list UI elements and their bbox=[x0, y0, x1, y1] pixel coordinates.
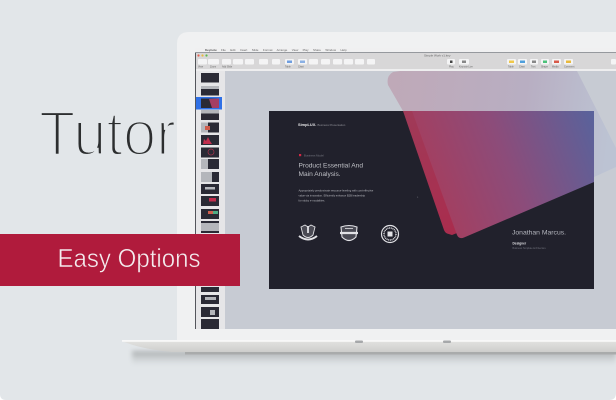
laptop lid bbox=[177, 32, 616, 340]
banner: Easy Options bbox=[0, 234, 240, 286]
front gradient card bbox=[412, 111, 594, 238]
menu bar: Keynote bbox=[205, 48, 217, 52]
laptop bbox=[122, 32, 616, 365]
toolbar: Add Slide bbox=[222, 65, 233, 68]
slide paragraph: for sticky e-modalities. bbox=[298, 198, 325, 202]
slide thumbnails sidebar bbox=[195, 53, 225, 329]
slide logo: SimpLUX. bbox=[298, 122, 316, 127]
toolbar: Media bbox=[552, 65, 559, 68]
menu bar bbox=[195, 48, 616, 53]
toolbar: Chart bbox=[519, 65, 525, 68]
title: Tutor: Tutor bbox=[39, 99, 176, 169]
icon: badge two bbox=[340, 226, 358, 240]
slide heading: Main Analysis. bbox=[298, 171, 341, 178]
toolbar: Zoom bbox=[210, 65, 216, 68]
ruler bbox=[195, 69, 616, 71]
presenter role bbox=[512, 242, 546, 250]
section marker: Business Model bbox=[304, 153, 324, 157]
slide heading bbox=[298, 162, 363, 178]
slide bbox=[269, 111, 594, 289]
banner: Easy Options: Easy Options bbox=[58, 243, 200, 273]
translucent card outside slide bbox=[388, 71, 616, 177]
slide arrow: › bbox=[417, 194, 419, 200]
presenter role: Business Template Architecture bbox=[512, 247, 546, 250]
presenter role: Designer bbox=[512, 242, 527, 246]
toolbar: Play bbox=[449, 65, 454, 68]
icon: badge one bbox=[299, 225, 317, 240]
toolbar: Comment bbox=[564, 65, 575, 68]
slide logo: Business Presentation bbox=[318, 123, 346, 127]
toolbar bbox=[195, 53, 616, 69]
slide paragraph: Appropriately predominate resource-leveling with cost-effective bbox=[298, 188, 374, 192]
slide logo bbox=[298, 122, 346, 127]
slide paragraph: value via innovation. Efficiently enhance B2B leadership bbox=[298, 194, 366, 198]
presenter name: Jonathan Marcus. bbox=[512, 230, 566, 236]
toolbar: Chart bbox=[298, 65, 304, 68]
laptop base bbox=[122, 340, 616, 365]
toolbar: View bbox=[198, 65, 203, 68]
toolbar: Table bbox=[285, 65, 291, 68]
icon: round seal bbox=[382, 226, 398, 242]
slide paragraph bbox=[298, 188, 374, 202]
toolbar: Simple Work v1.key bbox=[424, 54, 451, 58]
back card bbox=[403, 111, 456, 235]
app screen bbox=[195, 48, 616, 329]
menu bar: File Edit Insert Slide Format Arrange View Play Share Window Help bbox=[221, 48, 347, 52]
toolbar: Keynote Live bbox=[459, 65, 473, 68]
toolbar: Shape bbox=[541, 65, 549, 68]
toolbar: Table bbox=[508, 65, 514, 68]
toolbar: Text bbox=[531, 65, 536, 68]
slide heading: Product Essential And bbox=[298, 162, 363, 170]
